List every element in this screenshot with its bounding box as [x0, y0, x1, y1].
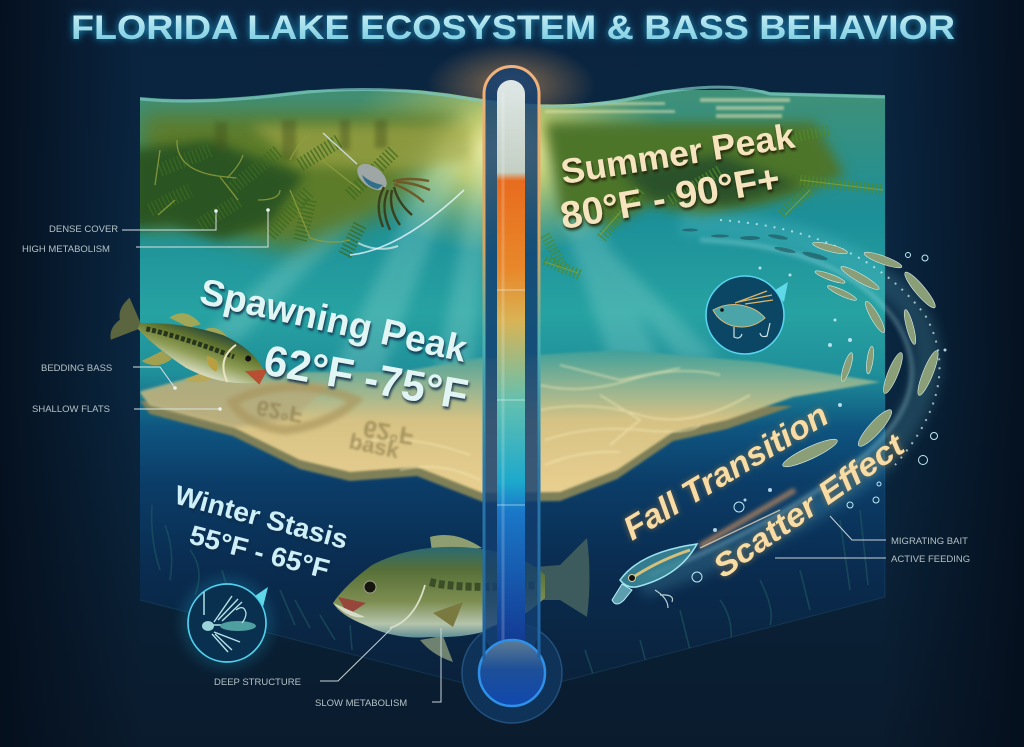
- heading: Winter Stasis: Winter Stasis: [171, 480, 351, 555]
- sun glow: [368, 88, 652, 249]
- label: shallow flats: [32, 404, 222, 415]
- title: FLORIDA LAKE ECOSYSTEM & BASS BEHAVIOR: [71, 9, 955, 47]
- label: migrating bait: MIGRATING BAIT: [891, 536, 968, 547]
- grass bottom: [152, 505, 868, 680]
- label: migrating bait: [830, 516, 968, 547]
- panel: lake cross-section: [140, 86, 885, 682]
- label: bedding bass: BEDDING BASS: [41, 363, 112, 374]
- aquatic plants left: [130, 112, 470, 255]
- heading: Spawning Peak: Spawning Peak: [196, 271, 471, 370]
- bait school and swirl: [640, 220, 946, 585]
- water surface: [140, 87, 885, 107]
- panel: sand flats: [140, 350, 885, 502]
- label: active feeding: ACTIVE FEEDING: [891, 554, 970, 565]
- label: dense cover: [49, 209, 218, 235]
- label: slow metabolism: SLOW METABOLISM: [315, 698, 407, 709]
- icon: glowing crankbait lure: [612, 490, 795, 608]
- heading: Fall Transition: [617, 396, 912, 585]
- heading: Winter Stasis: [171, 480, 351, 585]
- label: dense cover: DENSE COVER: [49, 224, 118, 235]
- icon: crankbait badge: [706, 276, 788, 354]
- icon: deep bass: [333, 535, 590, 662]
- aquatic plants right: [545, 98, 883, 275]
- sand mound ring: [232, 386, 356, 430]
- reflected text in sand: 62°F: [255, 395, 305, 428]
- reflected text in sand: [256, 400, 414, 459]
- icon: thermometer: [462, 67, 562, 723]
- sand ripples: [350, 365, 750, 480]
- label: high metabolism: [22, 208, 270, 255]
- icon: spinnerbait lure: [323, 133, 464, 255]
- heading: Summer Peak: Summer Peak: [558, 116, 798, 192]
- icon: bedding largemouth bass: [104, 292, 276, 404]
- heading: Summer Peak: 80°F - 90°F+: [557, 158, 783, 238]
- heading: Spawning Peak: 62°F -75°F: [260, 337, 471, 420]
- heading: Summer Peak: [557, 116, 798, 238]
- heading: Fall Transition: Fall Transition: [617, 396, 834, 547]
- reflected text in sand: 62°F: [361, 414, 416, 450]
- heading: Fall Transition: Scatter Effect: [706, 426, 912, 585]
- right and bottom edges: [140, 97, 885, 695]
- light rays: [200, 140, 720, 380]
- heading: Spawning Peak: [196, 271, 471, 420]
- label: bedding bass: [41, 363, 177, 390]
- icon: jig badge: [181, 577, 273, 669]
- label: shallow flats: SHALLOW FLATS: [32, 404, 110, 415]
- label: deep structure: DEEP STRUCTURE: [214, 677, 301, 688]
- text labels with leaders: [22, 208, 970, 709]
- label: deep structure: [214, 626, 394, 688]
- label: high metabolism: HIGH METABOLISM: [22, 244, 110, 255]
- label: slow metabolism: [315, 628, 441, 709]
- heading: Winter Stasis: 55°F - 65°F: [186, 520, 332, 585]
- reflected text in sand: bask: [347, 428, 402, 463]
